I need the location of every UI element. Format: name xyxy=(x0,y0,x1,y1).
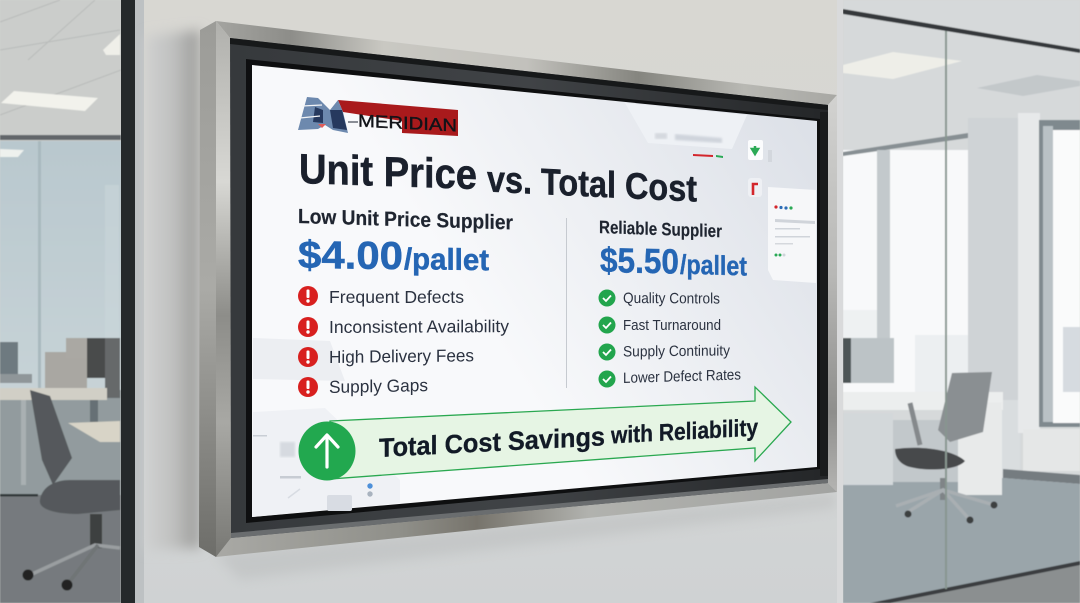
title: Unit Price xyxy=(299,145,477,198)
price: 5.50 dollars per pallet: /pallet xyxy=(680,250,747,282)
price: 5.50 dollars per pallet xyxy=(600,241,747,282)
right office desk xyxy=(843,338,1003,495)
benefit: supply continuity: Supply Continuity xyxy=(623,342,730,360)
door frame post xyxy=(121,0,135,603)
price: 4 dollars per pallet xyxy=(298,234,489,278)
screen background decoration xyxy=(252,103,816,517)
arrow label: Total Cost Savings xyxy=(379,421,605,463)
benefit: lower defect rates: Lower Defect Rates xyxy=(623,366,741,387)
title: vs. Total Cost xyxy=(487,158,697,210)
benefit: quality controls: Quality Controls xyxy=(623,290,720,307)
logo: Meridian xyxy=(298,97,458,136)
price: 4 dollars per pallet: /pallet xyxy=(404,243,489,277)
price: 4 dollars per pallet: $4.00 xyxy=(298,234,403,278)
column: reliable supplier xyxy=(598,217,747,388)
column: low unit price supplier xyxy=(298,205,513,397)
left office view through glass xyxy=(0,0,122,603)
drawback: inconsistent availability: Inconsistent Availability xyxy=(329,316,509,337)
title xyxy=(299,145,697,210)
wall xyxy=(135,0,843,603)
right office view through glass xyxy=(843,0,1080,603)
arrow label xyxy=(379,414,759,463)
right office chair xyxy=(895,372,998,524)
heading: reliable supplier: Reliable Supplier xyxy=(599,217,722,241)
heading: low unit price supplier: Low Unit Price Supplier xyxy=(298,205,513,234)
logo: Meridian: MERIDIAN xyxy=(358,111,457,136)
arrow label: with Reliability xyxy=(610,414,759,450)
left office chair xyxy=(22,390,120,590)
display screen xyxy=(252,65,817,517)
price: 5.50 dollars per pallet: $5.50 xyxy=(600,241,679,282)
stainless steel display frame xyxy=(199,21,837,557)
benefit: fast turnaround: Fast Turnaround xyxy=(623,317,721,334)
arrow: total cost savings with reliability xyxy=(298,387,791,480)
drawback: high delivery fees: High Delivery Fees xyxy=(329,345,474,367)
icon: green circle with up arrow xyxy=(298,422,356,480)
drawback: supply gaps: Supply Gaps xyxy=(329,375,428,397)
drawback: frequent defects: Frequent Defects xyxy=(329,287,464,307)
